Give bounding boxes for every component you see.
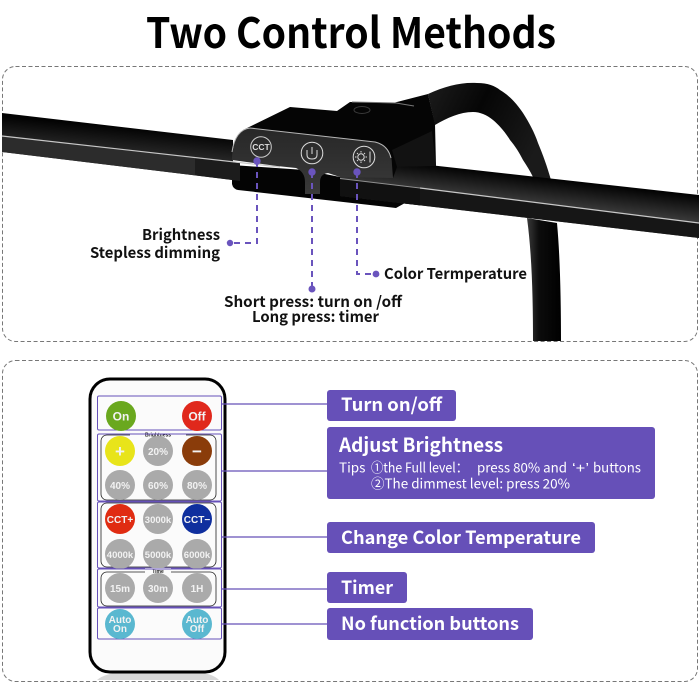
remote row: color temperature: 5000k	[145, 550, 172, 561]
remote row: timer: 30m	[148, 584, 168, 595]
control plate	[232, 128, 393, 194]
screw	[354, 106, 370, 114]
callout: brightness	[90, 157, 261, 263]
label: turn on/off: Turn on/off	[341, 391, 443, 417]
remote row: brightness: 20%	[148, 447, 168, 458]
callout: power: Long press: timer	[252, 306, 379, 327]
callout: color temperature: Color Termperature	[384, 263, 527, 284]
remote shadow	[97, 672, 219, 680]
panel: lamp control	[2, 66, 699, 342]
remote row: color temperature	[98, 502, 222, 569]
remote row: timer: 1H	[191, 584, 203, 595]
remote row: auto: Off	[190, 624, 205, 635]
label: adjust brightness: Adjust Brightness	[338, 429, 503, 458]
remote body	[90, 379, 225, 672]
panel: remote	[2, 360, 698, 682]
lamp arm	[428, 83, 561, 341]
remote row: color temperature: 4000k	[107, 550, 134, 561]
remote row: auto: Auto	[109, 615, 131, 626]
remote row: auto: On	[113, 624, 127, 635]
label: adjust brightness: buttons	[593, 456, 641, 476]
callout: power	[224, 168, 403, 327]
callout: power: Short press: turn on /off	[224, 291, 403, 312]
remote row: on off: On	[113, 410, 129, 424]
callout: brightness: Stepless dimming	[90, 242, 220, 263]
remote row: on off	[98, 396, 222, 431]
remote row: color temperature: 6000k	[184, 550, 211, 561]
label: change color temperature: Change Color Temperature	[341, 524, 581, 550]
button: power	[301, 142, 323, 164]
under clamp	[232, 165, 405, 208]
callout: brightness: Brightness	[142, 224, 220, 245]
remote row: color temperature: 3000k	[145, 515, 172, 526]
title: Two Control Methods	[146, 0, 556, 61]
label: no function buttons	[327, 608, 533, 640]
remote row: brightness: 60%	[148, 481, 168, 492]
remote row: auto	[98, 608, 222, 639]
remote row: on off: Off	[188, 410, 207, 424]
remote row: auto: Auto	[186, 615, 208, 626]
label: adjust brightness	[327, 427, 655, 499]
button: brightness	[353, 146, 375, 168]
remote row: brightness: 40%	[110, 481, 130, 492]
remote row: brightness: +	[115, 442, 125, 461]
left bar	[2, 113, 280, 181]
clamp body	[232, 94, 436, 194]
remote row: color temperature: CCT−	[184, 515, 210, 526]
label: timer: Timer	[341, 574, 393, 600]
remote row: brightness: Brightness	[145, 432, 171, 438]
label: no function buttons: No function buttons	[341, 610, 519, 636]
remote row: brightness	[98, 431, 222, 501]
remote row: brightness: 80%	[187, 481, 207, 492]
button: CCT	[251, 137, 271, 157]
connector lines	[221, 404, 327, 624]
label: adjust brightness: press 80% and	[477, 456, 567, 476]
right bar	[340, 155, 699, 238]
label: adjust brightness: ①the Full level：	[371, 456, 468, 476]
remote row: timer: 15m	[110, 584, 130, 595]
callout: color temperature	[353, 168, 527, 284]
remote row: color temperature: CCT+	[107, 515, 133, 526]
label: adjust brightness: ②The dimmest level: press 20%	[371, 472, 570, 492]
label: timer	[327, 572, 407, 603]
label: adjust brightness: Tips	[339, 456, 366, 476]
button: CCT: CCT	[252, 142, 271, 152]
label: turn on/off	[327, 390, 456, 421]
remote row: timer	[98, 568, 222, 607]
remote row: brightness: −	[192, 442, 202, 461]
label: adjust brightness: ‘+’	[572, 460, 589, 476]
remote row: timer: Time	[152, 569, 164, 575]
